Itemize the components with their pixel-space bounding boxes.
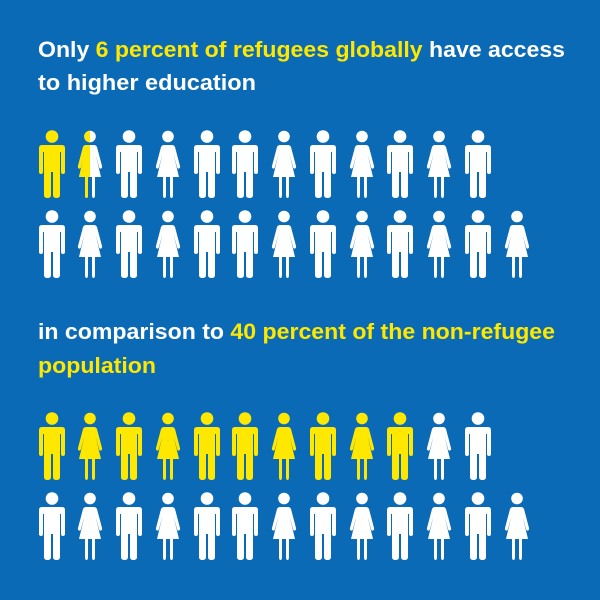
pictogram: refugees row 1 bbox=[39, 130, 491, 198]
pictogram: non-refugees row 2 bbox=[39, 492, 529, 560]
title bbox=[38, 37, 565, 95]
subheading: population bbox=[38, 353, 156, 378]
title: to higher education bbox=[38, 70, 256, 95]
pictogram: refugees row 2 bbox=[39, 210, 529, 278]
pictogram: non-refugees row 1 bbox=[39, 412, 491, 480]
subheading bbox=[38, 319, 555, 378]
subheading: in comparison to 40 percent of the non-refugee bbox=[38, 319, 555, 344]
title: Only 6 percent of refugees globally have access bbox=[38, 37, 565, 62]
